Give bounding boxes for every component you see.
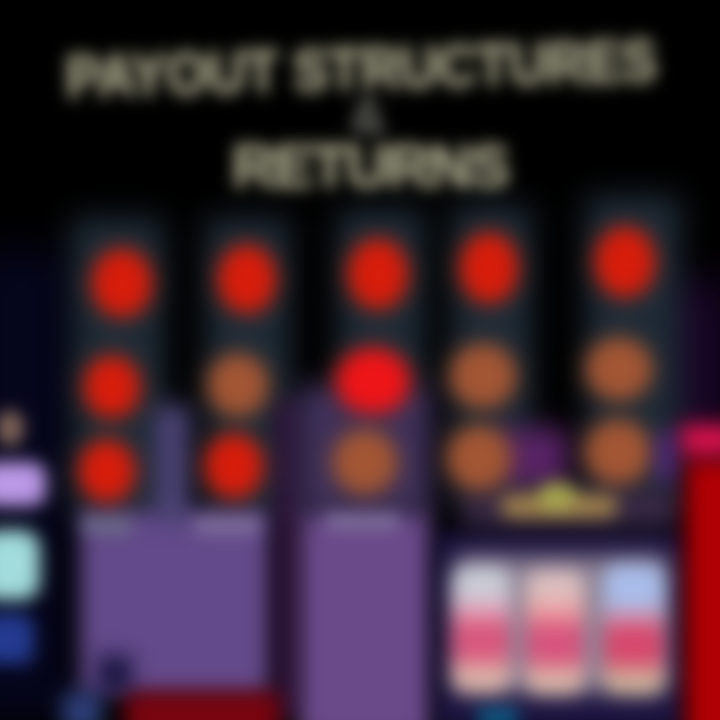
lilac band [0,462,46,506]
circle [208,354,268,416]
row 1 circles [75,210,672,334]
figure head [0,410,24,446]
panel: left figures [0,400,61,676]
reel 1 [452,566,510,692]
circle [585,420,651,484]
machine shoulder [462,490,677,526]
row 3 circles [62,406,664,516]
row 2 circles [67,322,668,434]
panel: purple block left [80,510,270,695]
blue band [0,614,34,664]
machine top glow [498,428,568,488]
purple riser [154,405,190,525]
green gem [538,482,576,510]
title [56,27,667,200]
title line two: RETURNS [232,133,508,200]
background glow left [0,250,70,720]
circle [460,233,518,303]
purple gutter [274,400,300,720]
circle [79,440,135,502]
panel: dark columns [58,180,696,519]
cyan band [0,530,40,600]
circle [333,430,397,494]
circle [595,227,655,297]
background glow right [660,280,720,450]
dark notch [98,655,132,691]
panel: purple block centre [300,510,430,720]
reel 3 [604,564,664,694]
column 1 backdrop [72,218,164,518]
column 3 backdrop [338,210,424,390]
panel: slot machine [430,411,691,720]
purple edge [658,432,674,482]
pink top [680,424,720,456]
panel: right red bar [646,407,720,720]
circle [336,348,410,414]
circle [205,434,263,498]
label strip 3 [325,512,400,530]
circle [348,239,408,309]
title line one: PAYOUT STRUCTURES [64,28,658,110]
circle [84,356,140,418]
teal coin tray [478,708,518,720]
label strip 1 [82,516,132,534]
title ampersand: & [350,88,386,144]
circle [450,344,516,408]
circle [92,249,152,317]
purple upper centre [298,385,432,515]
circle [218,245,276,313]
reel window [456,556,668,692]
label strip 2 [195,516,260,534]
circle [447,426,511,490]
machine body [436,532,682,720]
red floor [125,692,280,720]
circle [586,338,652,400]
reel 2 [526,570,584,694]
column 5 backdrop [586,196,680,506]
column 2 backdrop [206,218,290,518]
red bar [686,460,720,720]
blue floor [62,692,102,720]
column 4 backdrop [452,206,532,506]
gold crest [500,494,618,518]
